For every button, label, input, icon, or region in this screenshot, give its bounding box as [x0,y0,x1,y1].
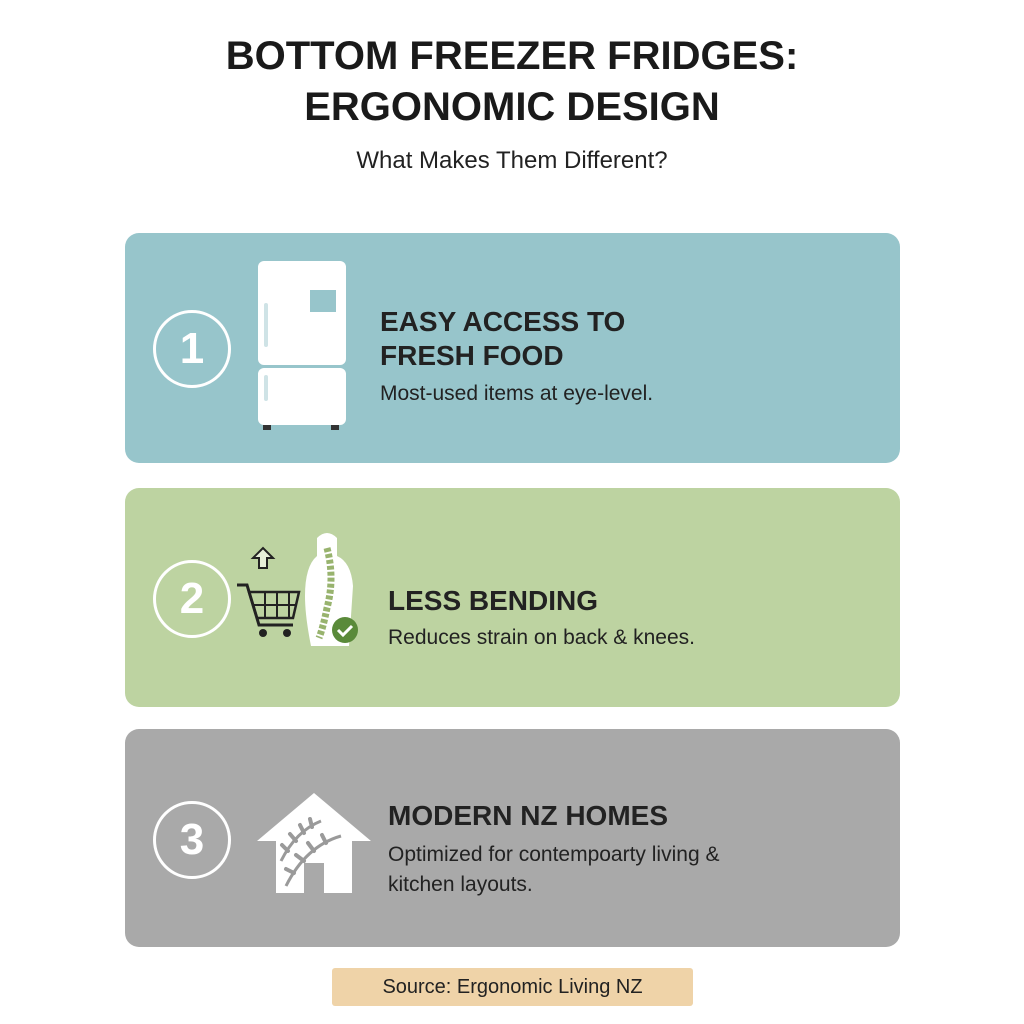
title [226,34,798,129]
description: Most-used items at eye-level. [380,382,653,405]
icon: fridge [258,261,346,430]
heading [380,306,625,371]
panel: modern nz homes [125,729,900,947]
number 1: 1 [180,324,204,373]
icon: house with fern [257,793,371,893]
icon: cart and spine [237,533,358,646]
number 2: 2 [180,574,204,623]
panel: easy access [125,233,900,463]
source label: Source: Ergonomic Living NZ [382,976,643,998]
panel: less bending [125,488,900,707]
heading: EASY ACCESS TO [380,306,625,337]
description: Optimized for contempoarty living & [388,843,719,866]
description: kitchen layouts. [388,873,533,896]
heading: FRESH FOOD [380,340,564,371]
title: ERGONOMIC DESIGN [304,85,720,129]
title: BOTTOM FREEZER FRIDGES: [226,34,798,78]
number 2 [153,560,231,638]
number 1 [153,310,231,388]
description: Reduces strain on back & knees. [388,626,695,649]
number 3: 3 [180,815,204,864]
subtitle: What Makes Them Different? [356,147,668,174]
number 3 [153,801,231,879]
source label [332,968,693,1006]
heading: MODERN NZ HOMES [388,800,668,831]
heading: LESS BENDING [388,585,598,616]
description [388,843,720,896]
